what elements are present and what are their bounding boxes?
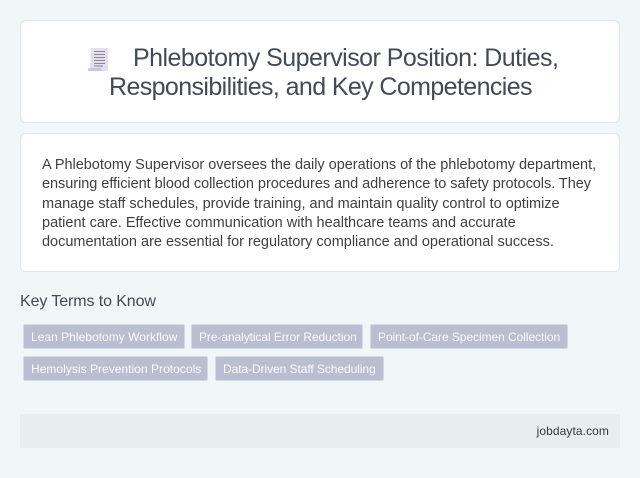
panel: title card (20, 20, 620, 123)
tag: Point-of-Care Specimen Collection (378, 330, 560, 344)
tag: Data-Driven Staff Scheduling (223, 362, 376, 376)
panel: description (20, 133, 620, 272)
tag: Hemolysis Prevention Protocols (31, 362, 201, 376)
heading: key terms: Key Terms to Know (20, 293, 156, 310)
tag: Pre-analytical Error Reduction (199, 330, 357, 344)
description line 2: ensuring efficient blood collection procedures and adherence to safety protocols. They (42, 176, 591, 192)
description line 3: manage staff schedules, provide training, and maintain quality control to optimize (42, 196, 560, 212)
tag (370, 324, 568, 349)
title line 1: Phlebotomy Supervisor Position: Duties, (133, 44, 558, 72)
title line 2: Responsibilities, and Key Competencies (109, 73, 532, 101)
footer source: jobdayta.com (537, 424, 609, 438)
tag (191, 324, 363, 349)
description line 4: patient care. Effective communication with healthcare teams and accurate (42, 215, 516, 231)
footer bar (20, 414, 620, 448)
tag (215, 356, 384, 381)
tag (23, 324, 185, 349)
tag: Lean Phlebotomy Workflow (31, 330, 177, 344)
description line 5: documentation are essential for regulatory compliance and operational success. (42, 234, 554, 250)
icon: document scroll (88, 48, 108, 71)
description line 1: A Phlebotomy Supervisor oversees the daily operations of the phlebotomy department, (42, 157, 596, 173)
tag (23, 356, 208, 381)
tag list (23, 324, 568, 381)
